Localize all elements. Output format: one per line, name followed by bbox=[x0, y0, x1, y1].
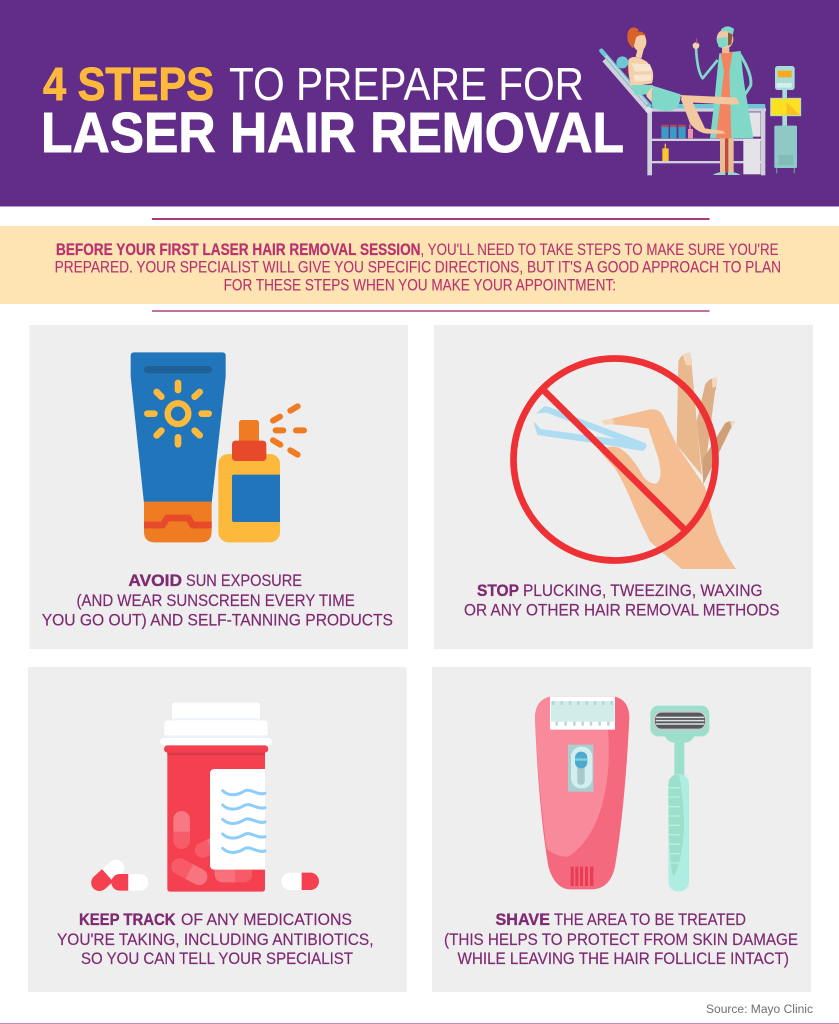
icon: hand with tweezers in prohibition sign bbox=[513, 352, 736, 569]
caption bbox=[57, 910, 374, 968]
panel: avoid sun exposure bbox=[30, 325, 408, 649]
source note: Source: Mayo Clinic bbox=[706, 1004, 813, 1016]
title: 4 STEPS bbox=[43, 58, 214, 110]
intro text: BEFORE YOUR FIRST LASER HAIR REMOVAL SESSION bbox=[56, 241, 420, 259]
caption: YOU'RE TAKING, INCLUDING ANTIBIOTICS, bbox=[57, 930, 374, 949]
caption: SO YOU CAN TELL YOUR SPECIALIST bbox=[81, 949, 353, 968]
laser machine bbox=[771, 66, 801, 173]
caption: OR ANY OTHER HAIR REMOVAL METHODS bbox=[464, 601, 780, 620]
caption: THE AREA TO BE TREATED bbox=[554, 910, 746, 929]
divider top bbox=[152, 218, 710, 220]
caption: YOU GO OUT) AND SELF-TANNING PRODUCTS bbox=[42, 611, 393, 630]
specialist bbox=[693, 26, 753, 175]
intro text: FOR THESE STEPS WHEN YOU MAKE YOUR APPOINTMENT: bbox=[224, 276, 616, 294]
razor bbox=[650, 706, 709, 892]
title: LASER HAIR REMOVAL bbox=[41, 102, 624, 165]
bottom rule bbox=[0, 1023, 839, 1024]
intro band bbox=[0, 226, 839, 304]
title: TO PREPARE FOR bbox=[229, 58, 584, 110]
caption: KEEP TRACK bbox=[79, 910, 176, 929]
illustration: patient on treatment chair with specialist and laser machine bbox=[601, 26, 801, 175]
caption bbox=[42, 571, 393, 630]
icon: sunscreen tube and spray bottle bbox=[131, 352, 304, 542]
panel: stop plucking bbox=[434, 325, 813, 649]
caption: STOP bbox=[477, 581, 519, 600]
panel: keep track of medications bbox=[28, 667, 407, 992]
caption: (AND WEAR SUNSCREEN EVERY TIME bbox=[76, 591, 355, 610]
patient bbox=[627, 27, 739, 134]
caption bbox=[444, 910, 798, 968]
icon: pill bottle and capsules bbox=[88, 703, 319, 894]
header banner bbox=[0, 0, 839, 206]
panel: shave bbox=[432, 667, 811, 992]
title bbox=[41, 58, 624, 165]
intro text bbox=[55, 241, 781, 294]
caption: SUN EXPOSURE bbox=[186, 571, 302, 590]
caption: AVOID bbox=[128, 571, 182, 590]
caption: (THIS HELPS TO PROTECT FROM SKIN DAMAGE bbox=[444, 930, 798, 949]
caption: OF ANY MEDICATIONS bbox=[181, 910, 352, 929]
divider bottom bbox=[152, 310, 710, 312]
epilator bbox=[535, 697, 629, 889]
caption: PLUCKING, TWEEZING, WAXING bbox=[523, 581, 762, 600]
caption: WHILE LEAVING THE HAIR FOLLICLE INTACT) bbox=[458, 949, 789, 968]
icon: epilator and razor bbox=[535, 697, 709, 892]
caption: SHAVE bbox=[496, 910, 550, 929]
caption bbox=[464, 581, 780, 620]
